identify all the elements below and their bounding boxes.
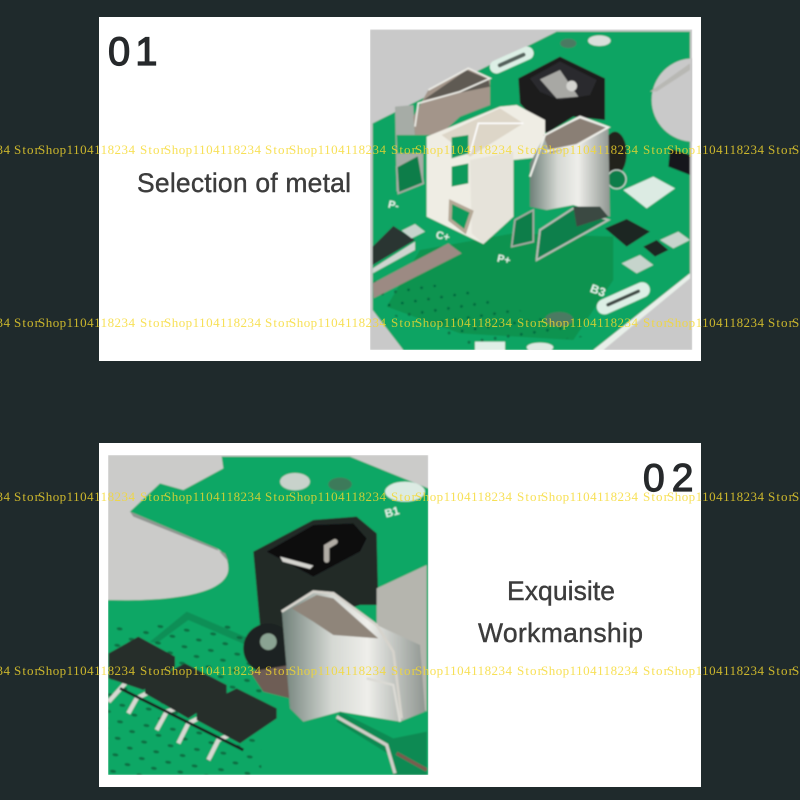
watermark text rows: Stor — [265, 315, 291, 330]
board labels: B3 — [588, 281, 608, 300]
watermark text rows: Stor — [768, 142, 794, 157]
watermark text rows: Shop1104118234 — [289, 315, 386, 330]
watermark text rows: Stor — [14, 489, 40, 504]
watermark text rows: Stor — [140, 142, 166, 157]
watermark text rows: Shop1104118234 — [667, 663, 764, 678]
watermark text rows: Shop1104118234 — [541, 315, 638, 330]
watermark text rows: Shop1104118234 — [667, 142, 764, 157]
heading: exquisite workmanship — [478, 576, 643, 648]
board labels: P+ — [496, 253, 512, 267]
ic chips and pads — [373, 148, 690, 298]
heading: exquisite workmanship: Exquisite — [507, 576, 615, 606]
black connector — [518, 57, 605, 133]
watermark text rows: Shop1104118234 — [38, 315, 136, 330]
inductor — [603, 132, 627, 189]
mosfet chips — [109, 637, 277, 760]
left metal clip — [395, 68, 490, 193]
circuit board — [372, 30, 692, 350]
watermark text rows: Shop1104118234 — [164, 489, 262, 504]
slot b3 — [594, 280, 652, 317]
black connector — [253, 517, 378, 628]
watermark text rows: Stor — [643, 142, 669, 157]
board labels: P- — [387, 199, 400, 213]
watermark text rows: Shop1104118234 — [164, 663, 262, 678]
watermark text rows: Stor — [643, 315, 669, 330]
heading: exquisite workmanship: Workmanship — [478, 618, 643, 648]
watermark text rows: Stor — [140, 315, 166, 330]
watermark text rows: Shop1104118234 — [415, 489, 512, 504]
watermark text rows: Shop1104118234 — [667, 489, 764, 504]
metal clip — [282, 592, 427, 775]
circuit board — [108, 457, 428, 775]
number 02: 02 — [643, 457, 700, 500]
watermark text rows — [0, 142, 800, 678]
right metal clip — [512, 117, 610, 260]
watermark text rows: Stor — [14, 663, 40, 678]
watermark text rows: Shop1104118234 — [164, 142, 262, 157]
heading: selection of metal: Selection of metal — [137, 168, 351, 198]
gray holder — [377, 565, 427, 712]
photo: circuit board with metal clips — [370, 30, 692, 350]
watermark text rows: Stor — [517, 489, 543, 504]
watermark text rows: Stor — [517, 142, 543, 157]
panel: exquisite workmanship — [99, 443, 701, 787]
watermark text rows: Stor — [391, 315, 417, 330]
watermark text rows: Shop1104118234 — [667, 315, 764, 330]
watermark text rows: Shop1104118234 — [415, 315, 512, 330]
watermark text rows: Stor — [265, 489, 291, 504]
watermark text rows: Shop1104118234 — [541, 489, 638, 504]
watermark text rows: Stor — [643, 663, 669, 678]
watermark text rows: Shop1104118234 — [38, 142, 136, 157]
watermark text rows: Stor — [768, 315, 794, 330]
watermark text rows: Stor — [643, 489, 669, 504]
slot top — [488, 44, 536, 76]
watermark text rows: Shop1104118234 — [289, 663, 386, 678]
watermark text rows: Shop1104118234 — [541, 142, 638, 157]
watermark text rows: Stor — [265, 663, 291, 678]
watermark text rows: Stor — [517, 663, 543, 678]
circuit board: B1 — [384, 505, 401, 521]
watermark text rows: Shop1104118234 — [415, 142, 512, 157]
watermark text rows: Stor — [14, 315, 40, 330]
watermark text rows: Shop1104118234 — [289, 489, 386, 504]
watermark text rows: Stor — [768, 663, 794, 678]
watermark text rows: Shop1104118234 — [541, 663, 638, 678]
watermark text rows: Stor — [140, 663, 166, 678]
number 01: 01 — [108, 30, 162, 74]
watermark text rows: Shop1104118234 — [415, 663, 512, 678]
panel: selection of metal — [99, 17, 735, 361]
watermark text rows: Stor — [391, 142, 417, 157]
watermark text rows: Shop1104118234 — [164, 315, 262, 330]
white plastic holder — [427, 105, 545, 244]
photo: close-up of connector and mosfets — [108, 455, 428, 775]
watermark text rows: Stor — [391, 663, 417, 678]
watermark text rows: Stor — [265, 142, 291, 157]
watermark text rows: Stor — [140, 489, 166, 504]
watermark text rows: Stor — [391, 489, 417, 504]
board labels — [387, 199, 608, 300]
inductor — [243, 623, 293, 698]
watermark text rows: Stor — [517, 315, 543, 330]
board labels: C+ — [435, 229, 451, 244]
watermark text rows: Stor — [768, 489, 794, 504]
watermark text rows: Stor — [14, 142, 40, 157]
watermark text rows: Shop1104118234 — [38, 663, 136, 678]
watermark text rows: Shop1104118234 — [289, 142, 386, 157]
watermark text rows: Shop1104118234 — [38, 489, 136, 504]
